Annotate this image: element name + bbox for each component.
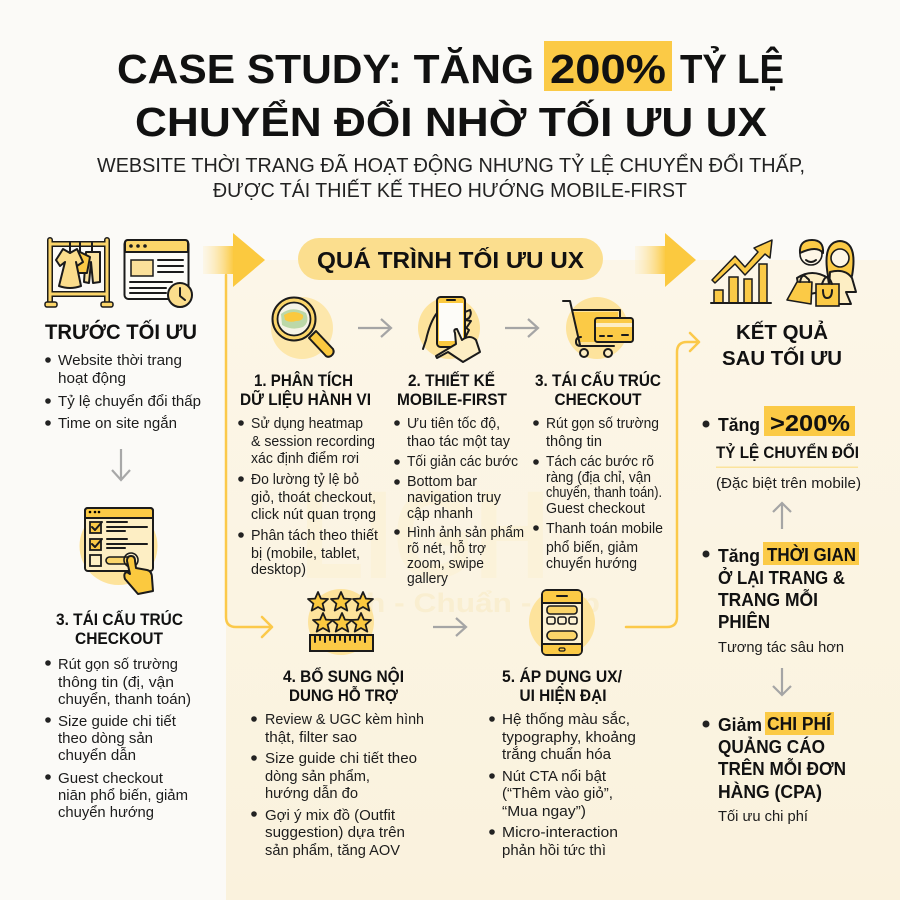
list: step 5: typography, khoảng [502,729,636,746]
heading: step 5 [502,667,622,705]
heading: step 5: 5. ÁP DỤNG UX/ [502,667,622,686]
list: step 5: Hệ thống màu sắc, [502,711,630,728]
list: step 3 [533,415,663,572]
list: left checkout: thông tin (đị, vận [58,674,174,691]
heading: step 3 [535,371,661,409]
list: step 2 [394,415,524,587]
list: left checkout: Guest checkout [58,770,164,787]
list: before optimization: Website thời trang [58,352,182,369]
list: step 4: sản phẩm, tăng AOV [265,842,400,859]
list: step 5: Micro-interaction [502,824,618,841]
heading: left checkout: 3. TÁI CẤU TRÚC [56,610,183,629]
connector: left branch to step 4 [226,275,272,637]
title: TỶ LỆ [680,46,784,92]
list: step 1: giỏ, thoát checkout, [251,489,376,506]
title [117,41,784,145]
list: before optimization: hoạt động [58,370,126,387]
list: left checkout: niān phổ biến, giảm [58,787,188,804]
list: step 2: thao tác một tay [407,433,510,450]
heading: step 4: 4. BỔ SUNG NỘI [283,667,404,686]
icon: clothing rack [45,240,113,307]
heading: step 1 [240,371,371,409]
result: time on page: THỜI GIAN [767,544,856,565]
list: step 1: desktop) [251,561,306,578]
result: CPA reduction: HÀNG (CPA) [718,781,822,802]
result: time on page [702,542,859,656]
arrow: down left [112,449,130,480]
result: CPA reduction: CHI PHÍ [767,713,832,734]
heading: step 2: MOBILE-FIRST [397,391,507,409]
list: step 3: phổ biến, giảm [546,539,638,556]
list: step 2: navigation truy [407,489,501,506]
heading pill: UX process: QUÁ TRÌNH TỐI ƯU UX [317,246,584,273]
arrow: before to process [203,233,265,287]
list: step 2: Bottom bar [407,473,477,490]
heading: results: KẾT QUẢ [736,321,828,344]
list: step 5: phản hồi tức thì [502,842,606,859]
list: step 2: cập nhanh [407,505,473,522]
icon: growth chart [711,240,772,303]
list: step 2: Tối giản các bước [407,453,518,470]
list: step 2: zoom, swipe [407,555,484,572]
title: CHUYỂN ĐỔI NHỜ TỐI ƯU UX [135,98,767,145]
list: step 1: xác định điểm rơi [251,450,359,467]
list: left checkout [45,656,191,821]
arrow: process to results [635,233,696,287]
list: left checkout: theo dòng sản [58,730,153,747]
heading: step 2 [397,371,507,409]
result: time on page: Tăng [718,546,760,566]
result: conversion increase: (Đặc biệt trên mobile) [716,475,861,492]
watermark: LIGH [300,466,550,605]
heading: step 3: CHECKOUT [554,391,642,409]
list: left checkout: Size guide chi tiết [58,713,177,730]
heading: left checkout: CHECKOUT [75,630,163,648]
arrow: step 1 to 2 [358,319,391,337]
subtitle [97,153,805,202]
result: CPA reduction: TRÊN MỖI ĐƠN [718,758,846,779]
list: before optimization: Time on site ngắn [58,415,177,432]
result: CPA reduction: Tối ưu chi phí [718,808,809,825]
list: step 5: (“Thêm vào giỏ”, [502,785,613,802]
list: step 3: Guest checkout [546,500,646,517]
list: step 5: “Mua ngay”) [502,803,586,820]
list: step 3: thông tin [546,433,602,450]
icon: phone in hands [418,297,480,362]
icon: happy shoppers [787,240,856,306]
result: CPA reduction: Giảm [718,715,762,735]
icon: website window with clock [124,240,192,307]
result: conversion increase: TỶ LỆ CHUYỂN ĐỔI [716,443,859,462]
list: step 4: hướng dẫn đo [265,785,358,802]
list: step 2: gallery [407,570,448,587]
heading: before optimization: TRƯỚC TỐI ƯU [45,318,197,344]
title: CASE STUDY: TĂNG [117,46,534,92]
arrow: up [773,503,791,529]
icon: magnifier heatmap [271,297,334,359]
list: step 5: trắng chuẩn hóa [502,746,612,763]
result: time on page: Ở LẠI TRANG & [718,567,845,588]
list: step 4: Review & UGC kèm hình [265,711,424,728]
list: step 3: ràng (địa chỉ, vận [546,469,651,486]
list: step 4: Size guide chi tiết theo [265,750,417,767]
heading pill: UX process [298,238,603,280]
arrow: step 4 to 5 [433,618,466,636]
result: conversion increase: >200% [770,410,850,436]
list: step 3: chuyển, thanh toán). [546,484,662,501]
list: step 2: rõ nét, hỗ trợ [407,540,486,557]
list: left checkout: Rút gọn số trường [58,656,178,673]
list: before optimization: Tỷ lệ chuyển đổi thấp [58,393,201,410]
list: step 5 [489,711,636,859]
list: step 4: dòng sản phẩm, [265,768,370,785]
list: step 3: Rút gọn số trường [546,415,659,432]
result: time on page: Tương tác sâu hơn [718,639,844,656]
icon: stars and ruler [308,589,374,655]
result: CPA reduction [702,712,846,825]
heading: results: SAU TỐI ƯU [722,346,842,370]
list: step 4 [251,711,424,859]
result: CPA reduction: QUẢNG CÁO [718,736,825,757]
subtitle: WEBSITE THỜI TRANG ĐÃ HOẠT ĐỘNG NHƯNG TỶ LỆ CHUYỂN ĐỔI THẤP, [97,153,805,177]
list: left checkout: chuyển, thanh toán) [58,691,191,708]
heading: step 5: UI HIỆN ĐẠI [520,686,606,705]
result: conversion increase: Tăng [718,415,760,435]
list: step 3: Thanh toán mobile [546,520,663,537]
list: before optimization [45,352,201,432]
icon: checklist with hand [80,507,158,594]
watermark: h - Chuẩn - Đẹp [366,588,600,618]
list: step 2: Hình ảnh sản phẩm [407,524,524,541]
arrow: step 2 to 3 [505,319,538,337]
list: step 3: Tách các bước rõ [546,453,654,470]
heading: step 4 [283,667,404,705]
arrow: down right [773,668,791,695]
subtitle: ĐƯỢC TÁI THIẾT KẾ THEO HƯỚNG MOBILE-FIRST [213,179,687,202]
list: left checkout: chuyển hướng [58,804,154,821]
title: 200% [550,46,666,92]
list: step 1: click nút quan trọng [251,506,376,523]
list: step 4: Gợi ý mix đồ (Outfit [265,807,396,824]
list: step 1: bị (mobile, tablet, [251,545,360,562]
icon: mobile UI [529,589,595,655]
heading: left checkout [56,610,183,648]
list: step 1 [238,415,379,578]
list: step 4: suggestion) dựa trên [265,824,405,841]
heading: step 4: DUNG HỖ TRỢ [289,686,399,705]
result: time on page: TRANG MỖI [718,589,818,610]
heading: step 1: DỮ LIỆU HÀNH VI [240,389,371,409]
connector: step 5 to results [626,333,699,627]
result: time on page: PHIÊN [718,611,770,632]
heading: step 2: 2. THIẾT KẾ [408,371,495,390]
list: step 4: thật, filter sao [265,729,357,746]
list: left checkout: chuyển dẫn [58,747,136,764]
heading: step 3: 3. TÁI CẤU TRÚC [535,371,661,390]
list: step 1: & session recording [251,433,375,450]
list: step 1: Đo lường tỷ lệ bỏ [251,471,359,488]
result: conversion increase [702,406,861,492]
heading: step 1: 1. PHÂN TÍCH [254,371,353,390]
list: step 1: Sử dụng heatmap [251,415,363,432]
list: step 1: Phân tách theo thiết [251,527,379,544]
list: step 3: chuyển hướng [546,555,637,572]
list: step 5: Nút CTA nổi bật [502,768,607,785]
heading: results [722,321,842,370]
list: step 2: Ưu tiên tốc độ, [407,415,500,432]
icon: cart with card [563,297,633,359]
panel: process and results background [226,260,900,900]
